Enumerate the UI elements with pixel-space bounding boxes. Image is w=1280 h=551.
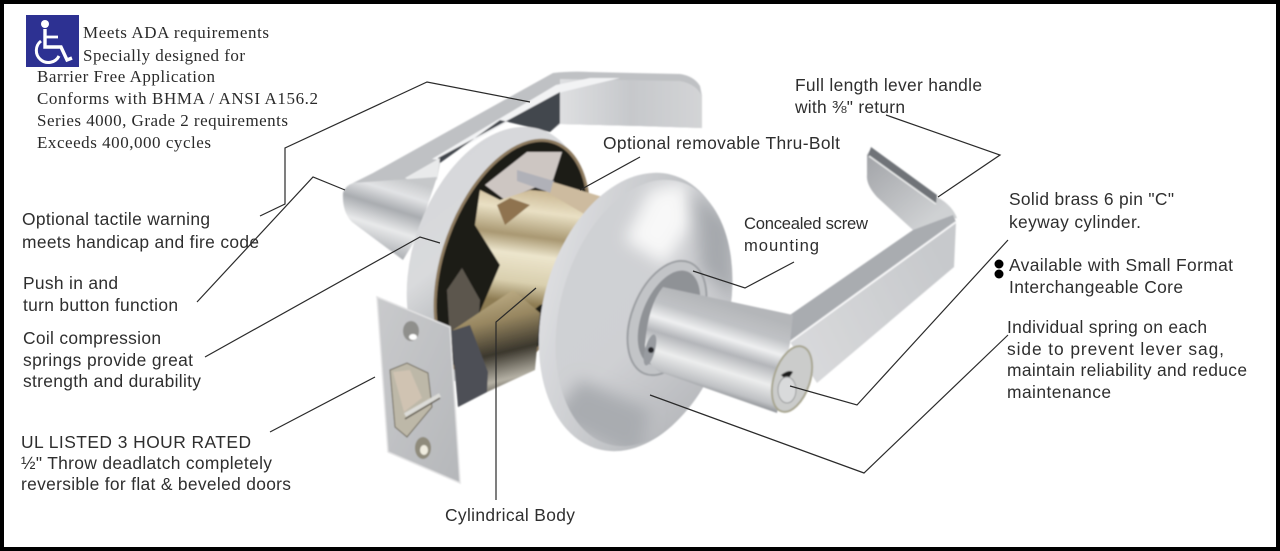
text: individual spring xyxy=(1007,317,1247,402)
text: UL listed deadlatch: UL LISTED 3 HOUR RATED xyxy=(21,432,251,452)
text: solid brass cylinder: keyway cylinder. xyxy=(1009,212,1141,232)
text: concealed screw mounting: mounting xyxy=(744,236,819,255)
text: UL listed deadlatch xyxy=(21,432,291,494)
text: coil compression springs: strength and durability xyxy=(23,371,201,391)
text: ADA and standards list xyxy=(37,23,318,152)
text: UL listed deadlatch: ½" Throw deadlatch completely xyxy=(21,453,272,473)
front rose plate xyxy=(538,172,734,452)
front lever handle xyxy=(787,147,957,383)
latch face plate xyxy=(377,297,460,483)
icon: black bullet dots xyxy=(994,260,1004,278)
latch body tube xyxy=(451,290,540,407)
text: ADA and standards list: Specially designed for xyxy=(83,46,245,65)
text: optional tactile warning xyxy=(22,209,259,252)
text: ADA and standards list: Exceeds 400,000 cycles xyxy=(37,133,211,152)
text: UL listed deadlatch: reversible for flat & beveled doors xyxy=(21,474,291,494)
text: coil compression springs: Coil compression xyxy=(23,328,161,348)
text: individual spring: maintain reliability and reduce xyxy=(1007,360,1247,380)
text: ADA and standards list: Series 4000, Grade 2 requirements xyxy=(37,111,288,130)
thru-bolt xyxy=(517,170,606,222)
text: concealed screw mounting: Concealed screw xyxy=(744,214,869,233)
text: push in and turn button: turn button function xyxy=(23,295,178,315)
text: individual spring: side to prevent lever sag, xyxy=(1007,339,1224,359)
text: concealed screw mounting xyxy=(744,214,869,255)
text: optional tactile warning: Optional tactile warning xyxy=(22,209,210,229)
lock illustration xyxy=(343,72,957,483)
front lever cylinder with key end xyxy=(641,287,820,417)
text: individual spring: maintenance xyxy=(1007,382,1111,402)
text: push in and turn button: Push in and xyxy=(23,273,118,293)
text: interchangeable core: Available with Small Format xyxy=(1009,255,1233,275)
front lever collar xyxy=(612,249,722,387)
text: ADA and standards list: Meets ADA requirements xyxy=(83,23,269,42)
rear rose opening with internal mechanism xyxy=(432,138,590,370)
rear lever knob xyxy=(343,177,437,260)
text: full length lever handle: with ⅜" return xyxy=(794,97,905,117)
text: optional thru-bolt: Optional removable Thru-Bolt xyxy=(603,133,840,153)
text: coil compression springs: springs provide great xyxy=(23,350,193,370)
text: full length lever handle: Full length lever handle xyxy=(795,75,982,95)
icon: ADA wheelchair symbol xyxy=(26,15,79,67)
text: full length lever handle xyxy=(794,75,982,117)
text: push in and turn button xyxy=(23,273,178,315)
text: individual spring: Individual spring on each xyxy=(1007,317,1207,337)
text: cylindrical body: Cylindrical Body xyxy=(445,505,575,525)
rear lever handle xyxy=(353,72,702,186)
callout leader lines xyxy=(197,82,1008,500)
text: solid brass cylinder: Solid brass 6 pin "C" xyxy=(1009,189,1174,209)
text: solid brass cylinder xyxy=(1009,189,1174,232)
rear rose plate xyxy=(374,102,620,408)
text: optional tactile warning: meets handicap and fire code xyxy=(22,232,259,252)
text: ADA and standards list: Barrier Free Application xyxy=(37,67,216,86)
text: interchangeable core xyxy=(1009,255,1233,297)
text: ADA and standards list: Conforms with BHMA / ANSI A156.2 xyxy=(37,89,318,108)
text: interchangeable core: Interchangeable Core xyxy=(1009,277,1183,297)
text: coil compression springs xyxy=(23,328,201,391)
